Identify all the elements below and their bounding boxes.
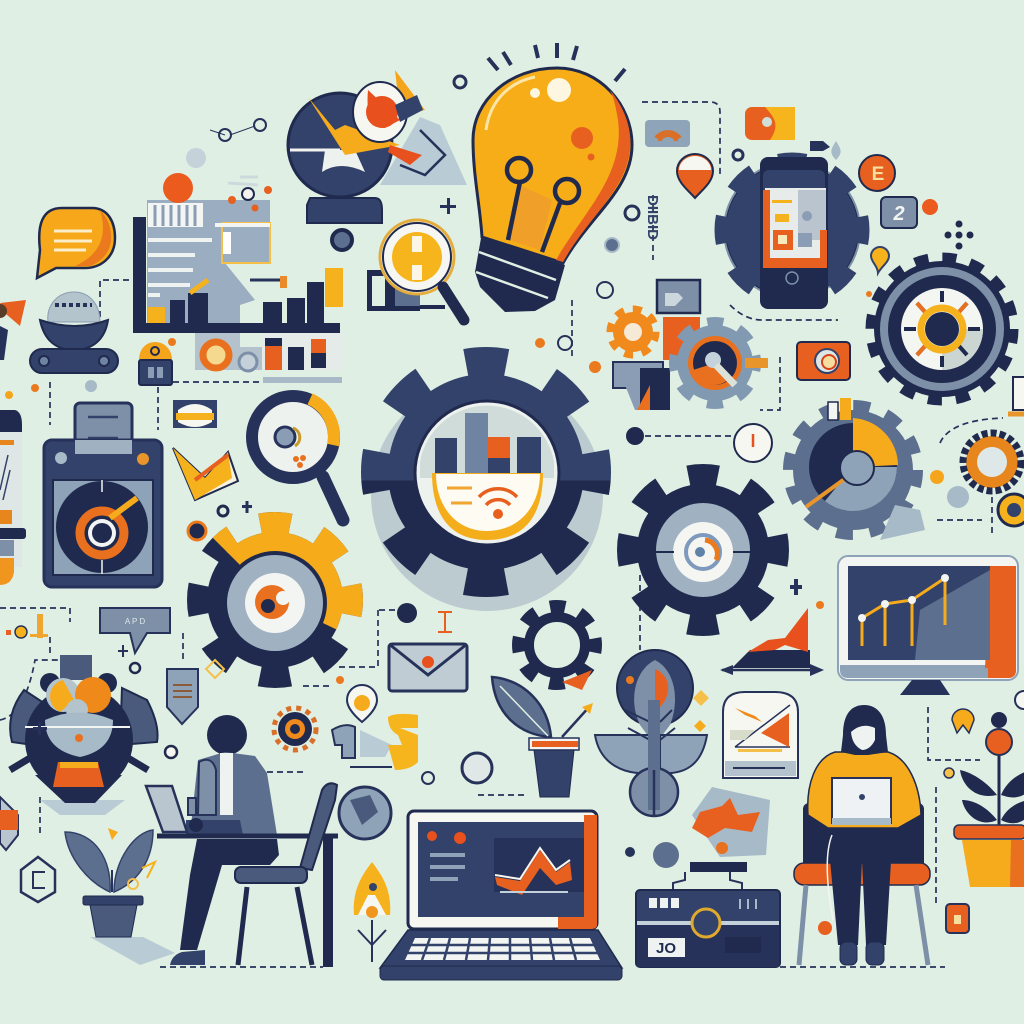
yellow bowl with wifi symbol <box>432 473 543 540</box>
icon: left hexagon <box>0 797 55 902</box>
icon: camera device <box>636 862 780 967</box>
icon: gear with target <box>628 475 778 625</box>
icon: camera badge <box>797 342 850 380</box>
icon: leaf plant with orange bud <box>595 650 707 816</box>
icon: large central gear <box>371 361 603 611</box>
icon: phone on gear <box>723 157 861 309</box>
icon: laptop with chart <box>380 811 622 980</box>
icon: right large gear <box>871 258 1013 400</box>
icon: camera device: JO <box>656 940 676 957</box>
icon: washing machine <box>44 403 162 587</box>
icon: number badges: 2 <box>892 203 905 225</box>
icon: globe <box>339 787 391 839</box>
icon: speech tag <box>100 608 170 653</box>
icon: robot head <box>10 655 158 815</box>
icon: yellow and navy gear <box>198 523 352 677</box>
icon: network nodes <box>186 76 619 632</box>
icon: bar chart document <box>133 173 343 383</box>
icon: cluster of mid gears <box>610 280 768 410</box>
icon: clover dots and pin <box>871 220 974 273</box>
icon: small navy gear <box>519 607 595 690</box>
icon: left edge flag <box>0 300 26 360</box>
icon: potted plant centre <box>492 677 593 797</box>
icon: pinwheel <box>625 787 770 868</box>
icon: left status glyph <box>6 614 48 638</box>
icon: small wifi badge and chat tags <box>625 107 841 240</box>
icon: woman with laptop on chair <box>794 705 930 965</box>
yellow gear sector <box>212 512 363 630</box>
icon: magnifier center-left <box>252 396 343 520</box>
icon: speech bubble <box>37 208 115 278</box>
icon: small right gear <box>963 377 1024 526</box>
icon: envelope <box>389 644 467 691</box>
icon: flower plant right <box>944 691 1024 933</box>
icon: scattered accents <box>5 198 872 935</box>
icon: speech tag: A P D <box>125 617 145 626</box>
icon: light bulb <box>473 43 632 312</box>
icon: rocket flower <box>354 862 390 962</box>
icon: monitor with line chart <box>838 556 1018 695</box>
icon: top satellite dish device <box>288 70 467 250</box>
icon: potted plant left <box>65 828 155 937</box>
icon: gauge gear <box>790 398 925 540</box>
icon: number badges <box>859 155 938 228</box>
icon: small gear and tags <box>274 685 492 784</box>
icon: number badges: E <box>872 164 884 185</box>
icon: magnifier with yellow lens <box>367 220 464 320</box>
icon: padlock <box>139 342 172 385</box>
icon: clock and dots <box>626 424 969 508</box>
icon: mail tags <box>173 400 238 540</box>
icon: chart card <box>723 692 798 778</box>
icon: mountain chart <box>720 608 824 676</box>
icon: left edge cylinder <box>0 410 26 585</box>
icon: bowl on conveyor <box>30 292 118 373</box>
icon: small wifi badge and chat tags: DIIBID <box>644 195 661 240</box>
icon: shield tag <box>130 663 198 724</box>
icon: man at desk with chair <box>90 715 338 967</box>
city skyline in gear <box>435 413 541 474</box>
